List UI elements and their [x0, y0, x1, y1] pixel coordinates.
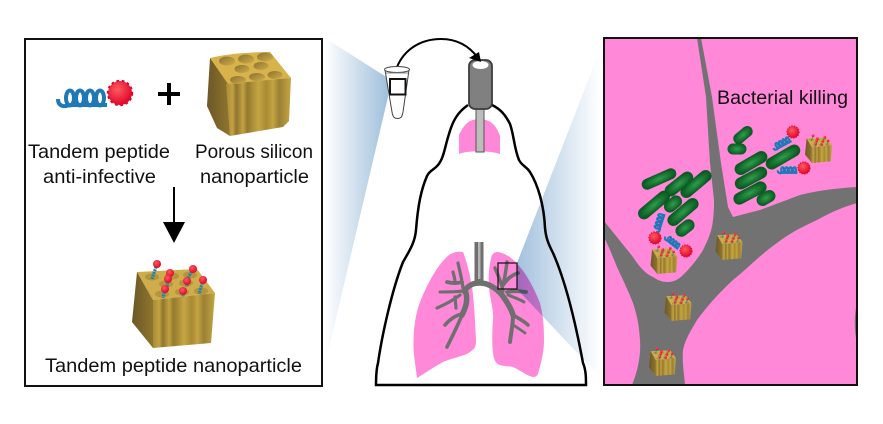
airways [437, 242, 528, 347]
icon: tandem peptide nanoparticle [132, 260, 215, 348]
plus sign [158, 83, 180, 105]
microtube [384, 66, 410, 118]
panel: bacterial killing [604, 38, 857, 385]
icon: porous silicon nanoparticle [207, 52, 291, 136]
heading: bacterial killing: Bacterial killing [717, 87, 848, 109]
nanoparticles [649, 134, 832, 376]
peptides [649, 126, 810, 257]
label: tandem peptide anti-infective: Tandem peptide [28, 141, 170, 163]
left zoom wedge [325, 38, 388, 365]
right zoom wedge [517, 50, 604, 385]
label: tandem peptide nanoparticle: Tandem peptide nanoparticle [45, 355, 302, 377]
airway channels [604, 38, 857, 385]
panel border [604, 38, 857, 385]
lungs [413, 252, 544, 378]
airway edge [855, 303, 857, 343]
transfer arrow [397, 39, 481, 67]
label: porous silicon: Porous silicon [195, 141, 313, 163]
bacteria group: left [636, 166, 714, 239]
icon: tandem peptide [58, 81, 132, 106]
mouse body outline [376, 105, 586, 385]
nasal cavity [459, 120, 500, 154]
label: nanoparticle: nanoparticle [200, 166, 309, 188]
label: anti-infective: anti-infective [43, 166, 156, 188]
lung magnifier box [498, 263, 517, 289]
syringe [469, 60, 492, 152]
panel: formulation [25, 39, 322, 386]
arrow: down [163, 187, 185, 243]
bacteria group: right [728, 124, 802, 208]
